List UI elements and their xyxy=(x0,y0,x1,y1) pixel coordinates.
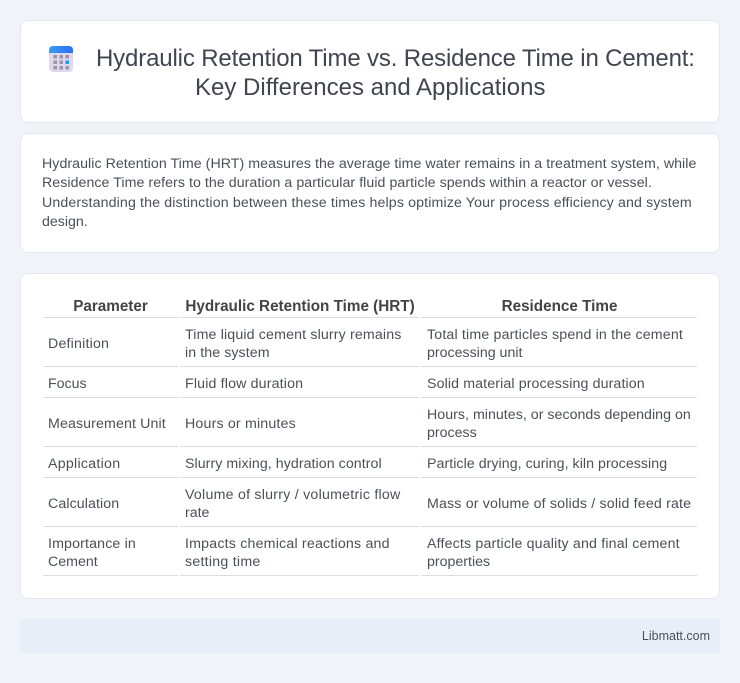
table header: Residence Time xyxy=(502,298,617,315)
table header xyxy=(73,298,617,315)
heading: Hydraulic Retention Time vs. Residence Time in Cement: xyxy=(96,45,695,72)
row: importance in cement: Impacts chemical reactions and xyxy=(185,536,390,552)
intro paragraph xyxy=(42,156,696,230)
row: definition xyxy=(48,327,683,361)
row: definition: processing unit xyxy=(427,345,522,361)
row: measurement unit xyxy=(48,407,691,441)
row: application: Slurry mixing, hydration control xyxy=(185,456,382,472)
row: measurement unit: Hours or minutes xyxy=(185,416,296,432)
row: definition: Time liquid cement slurry remains xyxy=(185,327,402,343)
row: focus: Solid material processing duration xyxy=(427,376,645,392)
row: calculation: Calculation xyxy=(48,496,119,512)
row: importance in cement: properties xyxy=(427,554,490,570)
intro paragraph: Understanding the distinction between these times helps optimize Your process efficiency and system xyxy=(42,195,692,211)
row: calculation: Mass or volume of solids / solid feed rate xyxy=(427,496,691,512)
row: focus xyxy=(48,376,645,392)
table header: Parameter xyxy=(73,298,148,315)
row: calculation: Volume of slurry / volumetric flow xyxy=(185,487,401,503)
row: importance in cement: Affects particle quality and final cement xyxy=(427,536,680,552)
row: application: Application xyxy=(48,456,120,472)
row: importance in cement xyxy=(48,536,680,570)
row: calculation xyxy=(48,487,691,521)
heading: Key Differences and Applications xyxy=(195,74,545,101)
footer credit: Libmatt.com xyxy=(642,629,710,643)
intro paragraph: design. xyxy=(42,214,88,230)
icon: calendar xyxy=(49,46,73,72)
row: definition: in the system xyxy=(185,345,270,361)
intro paragraph: Residence Time refers to the duration a particular fluid particle spends within a reactor or vessel. xyxy=(42,175,652,191)
row: focus: Fluid flow duration xyxy=(185,376,303,392)
footer xyxy=(20,619,720,653)
row: definition: Definition xyxy=(48,336,109,352)
panel: intro text xyxy=(20,133,720,253)
row: application: Particle drying, curing, kiln processing xyxy=(427,456,667,472)
row: measurement unit: process xyxy=(427,425,477,441)
row: importance in cement: Importance in xyxy=(48,536,136,552)
row: application xyxy=(48,456,667,472)
row: calculation: rate xyxy=(185,505,209,521)
row: definition: Total time particles spend in the cement xyxy=(427,327,683,343)
row: importance in cement: setting time xyxy=(185,554,261,570)
row: measurement unit: Hours, minutes, or seconds depending on xyxy=(427,407,691,423)
panel: title xyxy=(20,20,720,123)
row: importance in cement: Cement xyxy=(48,554,98,570)
panel: comparison table xyxy=(20,273,720,599)
row: focus: Focus xyxy=(48,376,87,392)
intro paragraph: Hydraulic Retention Time (HRT) measures the average time water remains in a treatment system, while xyxy=(42,156,696,172)
row: measurement unit: Measurement Unit xyxy=(48,416,166,432)
table header: Hydraulic Retention Time (HRT) xyxy=(185,298,415,315)
heading xyxy=(96,45,695,101)
